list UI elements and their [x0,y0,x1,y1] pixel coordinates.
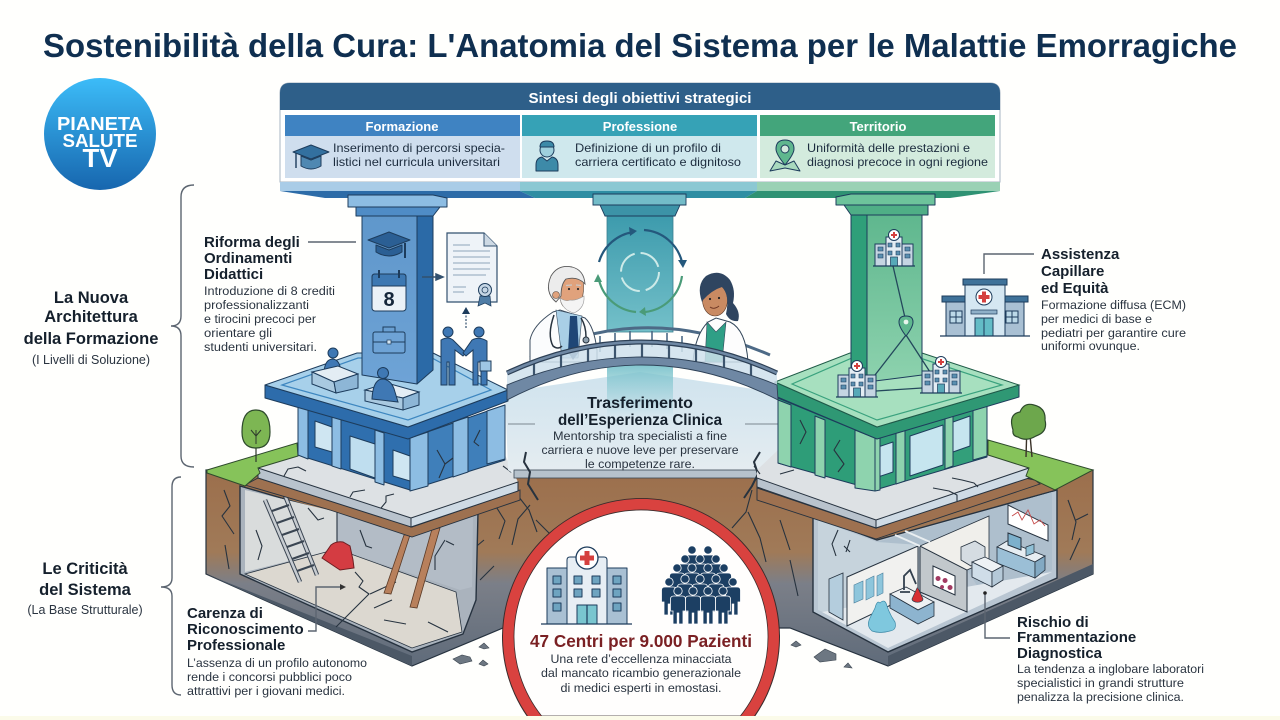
text: assistenza capillare ed equità: ed Equità [1041,280,1109,297]
text: rischio di frammentazione diagnostica: specialistici in grandi strutture [1017,676,1184,690]
text: assistenza capillare ed equità: per medici di base e [1041,312,1152,326]
purple poster [933,566,955,595]
text: assistenza capillare ed equità: Assistenza [1041,246,1120,263]
objective: Professione [522,115,757,178]
text: assistenza capillare ed equità [1041,246,1186,353]
label: le criticità del sistema: Le Criticità [42,560,128,578]
objective: Formazione [285,115,520,178]
centre pillar [593,194,687,332]
text: 47 centri: di medici esperti in emostasi. [560,681,722,695]
text: 47 centri: Una rete d’eccellenza minacciata [550,652,732,666]
green pillar [836,194,962,397]
bridge [507,342,778,400]
icon: tree [1012,404,1046,457]
text: carenza di riconoscimento professionale: L’assenza di un profilo autonomo [187,656,367,670]
label: la nuova architettura della formazione: La Nuova [54,289,129,307]
icon: crowd of patients [662,546,740,624]
text: carenza di riconoscimento professionale: Carenza di [187,605,263,622]
centre ground slab [505,362,780,500]
leader line: rischio [983,591,1010,638]
top bar: strategic objectives [280,83,1000,182]
icon: red telephone [322,542,354,570]
callout circle: key figures [502,498,780,716]
text: rischio di frammentazione diagnostica: Frammentazione [1017,629,1136,646]
text: carenza di riconoscimento professionale: attrattivi per i giovani medici. [187,684,345,698]
text: transfer of clinical experience: carriera e nuove leve per preservare [542,443,739,457]
icon: calendar with number 8 [372,270,406,311]
text: carenza di riconoscimento professionale: rende i concorsi pubblici poco [187,670,352,684]
people on blue platform [312,327,491,410]
label: la nuova architettura della formazione: della Formazione [24,330,158,348]
text: riforma degli ordinamenti didattici: Introduzione di 8 crediti [204,284,335,298]
certificate document [447,233,497,306]
blue pillar base building [298,398,505,491]
text: rischio di frammentazione diagnostica: Rischio di [1017,614,1089,631]
logo: Pianeta Salute TV: SALUTE [62,130,138,151]
blue pillar [348,195,447,384]
text: riforma degli ordinamenti didattici: e tirocini precoci per [204,312,316,326]
seated figure with desk [365,368,419,410]
text: rischio di frammentazione diagnostica: La tendenza a inglobare laboratori [1017,662,1204,676]
text: 47 centri: 47 Centri per 9.000 Pazienti [530,631,752,651]
green platform [775,353,1019,439]
label: le criticità del sistema: del Sistema [39,581,132,599]
icon: graduation cap [293,145,329,169]
left underground room [240,486,478,652]
icon: map pin [770,140,800,171]
text: riforma degli ordinamenti didattici: studenti universitari. [204,340,317,354]
posters [854,573,883,603]
seated figure with desk [312,348,358,393]
top bar: strategic objectives: Sintesi degli obiettivi strategici [528,91,752,107]
icon: tree [242,410,270,462]
green pillar base building [778,398,987,491]
objective: Territorio: Uniformità delle prestazioni e [807,141,970,155]
objective: Professione: carriera certificato e dignitoso [575,155,741,169]
objective: Formazione: Formazione [366,119,438,134]
text: riforma degli ordinamenti didattici: orientare gli [204,326,272,340]
text: riforma degli ordinamenti didattici: professionalizzanti [204,298,309,312]
icon: briefcase [373,327,405,353]
text: rischio di frammentazione diagnostica: Diagnostica [1017,645,1103,662]
handshake figures [441,327,491,385]
objective: Formazione: listici nel curricula universitari [333,155,500,169]
text: transfer of clinical experience: Trasferimento [587,395,693,412]
icon: ladder [265,493,317,582]
right ground slab [754,445,1040,539]
objective: Professione: Definizione di un profilo di [575,141,721,155]
leader line: carenza [308,584,346,631]
objective: Territorio: diagnosi precoce in ogni regione [807,155,988,169]
blue platform [265,353,508,439]
icon: calendar with number 8: 8 [383,289,395,311]
objective: Territorio [760,115,995,178]
text: transfer of clinical experience: Mentorship tra specialisti a fine [553,429,727,443]
text: 47 centri [530,631,752,695]
network lines [875,266,930,391]
text: riforma degli ordinamenti didattici: Didattici [204,266,263,283]
icon: seal [478,284,492,306]
icon: hospital [873,230,915,266]
wall chart [1008,505,1048,541]
text: assistenza capillare ed equità: pediatri per garantire cure [1041,326,1186,340]
icon: hospital large [940,279,1030,336]
label: le criticità del sistema: (La Base Strutturale) [27,603,143,617]
label: la nuova architettura della formazione: (I Livelli di Soluzione) [32,353,150,367]
icon: doctor [536,141,558,171]
text: riforma degli ordinamenti didattici: Ordinamenti [204,250,292,267]
left ground slab [245,445,523,537]
logo: Pianeta Salute TV: PIANETA [57,113,143,134]
logo: Pianeta Salute TV: TV [82,143,118,173]
blue spill [868,601,895,632]
text: rischio di frammentazione diagnostica: penalizza la precisione clinica. [1017,690,1184,704]
text: rischio di frammentazione diagnostica [1017,614,1204,704]
text: carenza di riconoscimento professionale [187,605,367,698]
text: transfer of clinical experience [542,395,739,471]
wooden props [384,528,440,608]
icon: circular arrows [594,227,687,316]
text: transfer of clinical experience: dell’Esperienza Clinica [558,412,722,429]
bridge back rail [530,328,770,358]
text: assistenza capillare ed equità: Formazione diffusa (ECM) [1041,298,1186,312]
text: carenza di riconoscimento professionale: Riconoscimento [187,621,304,638]
left grass and tree [207,410,298,486]
lab desk, microscope, flask [890,570,934,624]
bar underside [280,182,1000,198]
rocks [453,641,852,668]
text: 47 centri: dal mancato ricambio generazionale [541,666,741,680]
leader line: riforma [308,241,356,243]
title: Sostenibilità della Cura: L'Anatomia del Sistema per le Malattie Emorragiche [43,27,1237,64]
label: le criticità del sistema [27,560,143,617]
objective: Professione: Professione [603,119,677,134]
icon: map pin [899,316,913,336]
far desk and monitor [997,533,1045,578]
brace: le criticità [161,477,181,695]
arrow: pillar to certificate [422,274,443,280]
text: assistenza capillare ed equità: uniformi ovunque. [1041,339,1140,353]
text: carenza di riconoscimento professionale: Professionale [187,637,285,654]
text: assistenza capillare ed equità: Capillare [1041,263,1104,280]
icon: hospital [836,360,878,397]
label: la nuova architettura della formazione [24,289,158,367]
cabinet [829,573,843,620]
doctor: senior specialist [530,266,597,362]
arrow: handshake to certificate [462,307,470,328]
label: la nuova architettura della formazione: Architettura [44,308,139,326]
objective: Territorio: Territorio [850,119,906,134]
objective: Formazione: Inserimento di percorsi specia- [333,141,505,155]
icon: hospital [920,356,962,393]
doctor: young specialist [693,273,748,362]
text: riforma degli ordinamenti didattici [204,234,335,354]
logo: Pianeta Salute TV [44,78,156,190]
right grass and tree [988,404,1093,490]
text: riforma degli ordinamenti didattici: Riforma degli [204,234,300,251]
brace: la nuova architettura [171,185,194,467]
icon: hospital [541,547,632,624]
bottom edge strip [0,716,1280,720]
cracked ground and soil block [206,470,1093,666]
text: transfer of clinical experience: le competenze rare. [585,457,695,471]
instrument and bench [961,541,1003,587]
right underground room [813,490,1057,652]
icon: graduation cap [368,232,410,258]
leader line: assistenza [984,254,1034,274]
